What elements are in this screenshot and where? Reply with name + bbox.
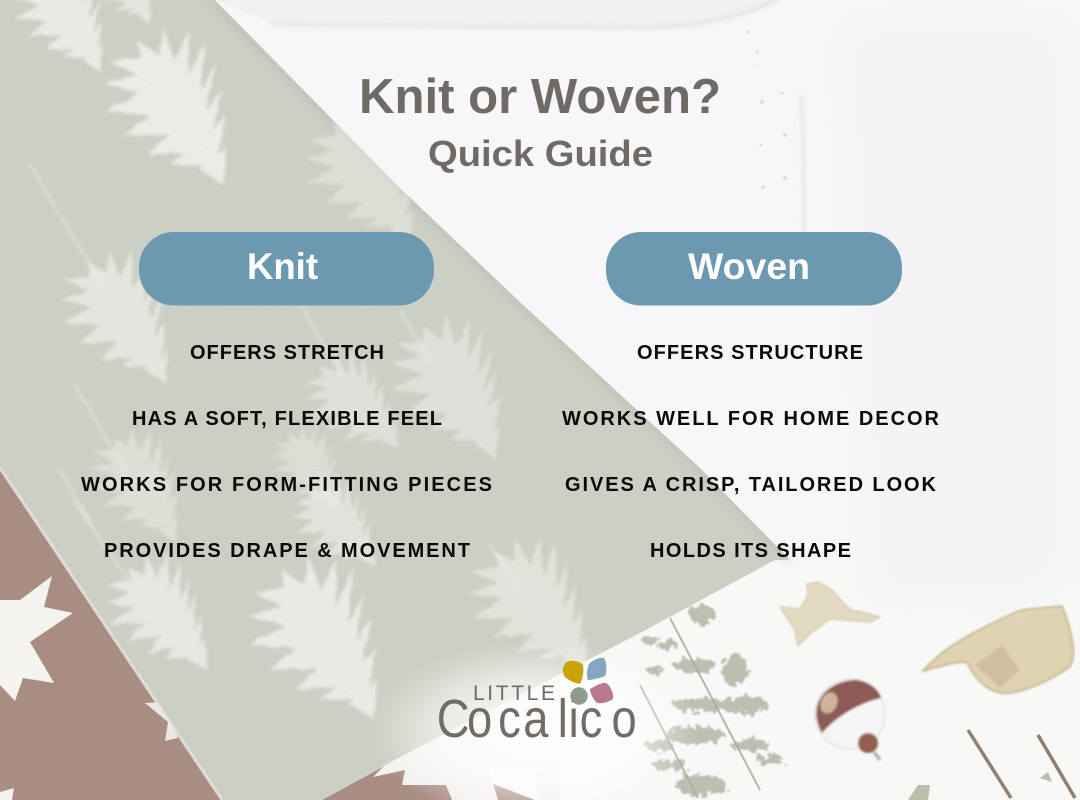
knit feature list: OFFERS STRETCH bbox=[190, 342, 384, 364]
lower brown patch bbox=[322, 752, 535, 800]
print motifs: fishing illustrations bbox=[640, 582, 1075, 800]
lower white star bbox=[373, 660, 560, 800]
seam crease bbox=[800, 95, 805, 290]
woven feature list: GIVES A CRISP, TAILORED LOOK bbox=[565, 474, 937, 496]
knit heading pill bbox=[139, 232, 434, 306]
pale edge of sage fabric bbox=[0, 468, 222, 800]
woven feature list: OFFERS STRUCTURE bbox=[637, 342, 863, 364]
woven feature list bbox=[562, 342, 940, 562]
knit feature list: PROVIDES DRAPE & MOVEMENT bbox=[104, 540, 470, 562]
knit feature list bbox=[81, 342, 492, 562]
woven feature list: WORKS WELL FOR HOME DECOR bbox=[562, 408, 940, 430]
woven heading pill bbox=[606, 232, 902, 306]
logo glow bbox=[370, 620, 700, 800]
fern pattern bbox=[16, 0, 588, 719]
logo: Little Cocalico bbox=[437, 658, 637, 749]
top fold of white fabric bbox=[215, 0, 780, 28]
brown fabric with stars bbox=[0, 468, 560, 800]
right side cloth tone bbox=[850, 30, 1060, 590]
tree motif bbox=[640, 605, 784, 798]
woven heading pill: Woven bbox=[688, 246, 810, 287]
small star bbox=[145, 702, 178, 741]
fold shadow line bbox=[270, 0, 778, 28]
star bbox=[0, 576, 73, 701]
icon: logo petals bbox=[563, 658, 613, 705]
logo wordmark LITTLE: LITTLE bbox=[473, 682, 555, 705]
logo wordmark Cocalico: Cocalico bbox=[437, 688, 637, 749]
hat motif bbox=[923, 606, 1073, 693]
title: Knit or Woven? bbox=[359, 70, 721, 124]
knit feature list: WORKS FOR FORM-FITTING PIECES bbox=[81, 474, 492, 496]
subtitle: Quick Guide bbox=[428, 133, 653, 174]
knit feature list: HAS A SOFT, FLEXIBLE FEEL bbox=[132, 408, 442, 430]
twig motifs bbox=[968, 730, 1075, 798]
panel: woven column bbox=[562, 232, 940, 562]
seam dots bbox=[746, 30, 787, 189]
white woven fabric bbox=[215, 0, 1080, 612]
panel: knit column bbox=[81, 232, 492, 562]
fishing bobber bbox=[815, 679, 885, 760]
knit heading pill: Knit bbox=[247, 246, 318, 287]
sage green fabric bbox=[0, 0, 790, 800]
sage fabric weave texture bbox=[10, 0, 578, 794]
hat patch bbox=[975, 645, 1020, 688]
dog bone / fish motif bbox=[780, 582, 880, 646]
woven feature list: HOLDS ITS SHAPE bbox=[650, 540, 851, 562]
corner star bbox=[0, 788, 14, 800]
small leaves bbox=[908, 772, 1052, 800]
fold shadow along white fabric bbox=[212, 0, 790, 560]
